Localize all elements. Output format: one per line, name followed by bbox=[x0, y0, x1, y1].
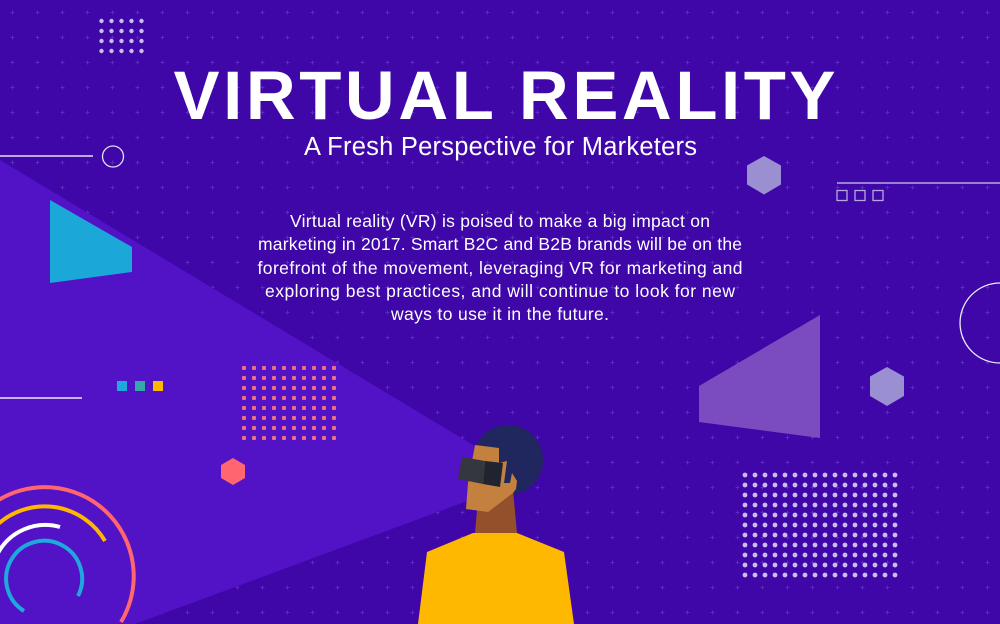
shirt bbox=[418, 533, 574, 624]
headset side bbox=[483, 461, 503, 487]
person wearing VR headset bbox=[418, 425, 574, 624]
face bbox=[466, 445, 517, 512]
intro paragraph: forefront of the movement, leveraging VR for marketing and bbox=[258, 258, 742, 278]
line and circle: top left bbox=[0, 146, 124, 167]
intro paragraph bbox=[258, 211, 742, 324]
dot grid: top left bbox=[96, 16, 146, 56]
intro paragraph: ways to use it in the future. bbox=[390, 304, 609, 324]
three colored squares bbox=[117, 381, 163, 391]
dot grid: coral bbox=[239, 363, 339, 443]
trapezoid: cyan bbox=[50, 200, 132, 283]
arc: coral bbox=[0, 487, 134, 622]
hexagon: upper right bbox=[747, 156, 781, 194]
title: VIRTUAL REALITY bbox=[174, 57, 836, 134]
line: left bbox=[0, 397, 82, 399]
arc: yellow bbox=[0, 506, 105, 541]
dot grid: bottom right bbox=[740, 470, 900, 580]
light beam from headset bbox=[0, 160, 478, 624]
intro paragraph: marketing in 2017. Smart B2C and B2B brands will be on the bbox=[258, 234, 742, 254]
hair bbox=[473, 425, 543, 495]
arc: white bbox=[0, 525, 60, 553]
intro paragraph: Virtual reality (VR) is poised to make a big impact on bbox=[290, 211, 710, 231]
arc: cyan bbox=[6, 541, 82, 611]
line and three squares: right bbox=[837, 183, 1000, 200]
subtitle: A Fresh Perspective for Marketers bbox=[304, 133, 697, 161]
concentric arcs bbox=[0, 487, 134, 622]
trapezoid: right bbox=[699, 315, 820, 438]
partial circle: right edge bbox=[960, 283, 1000, 363]
hexagon: coral bbox=[221, 458, 245, 485]
hexagon: lower right bbox=[870, 367, 904, 406]
neck bbox=[475, 490, 517, 533]
headset bbox=[458, 457, 485, 484]
intro paragraph: exploring best practices, and will continue to look for new bbox=[265, 281, 735, 301]
